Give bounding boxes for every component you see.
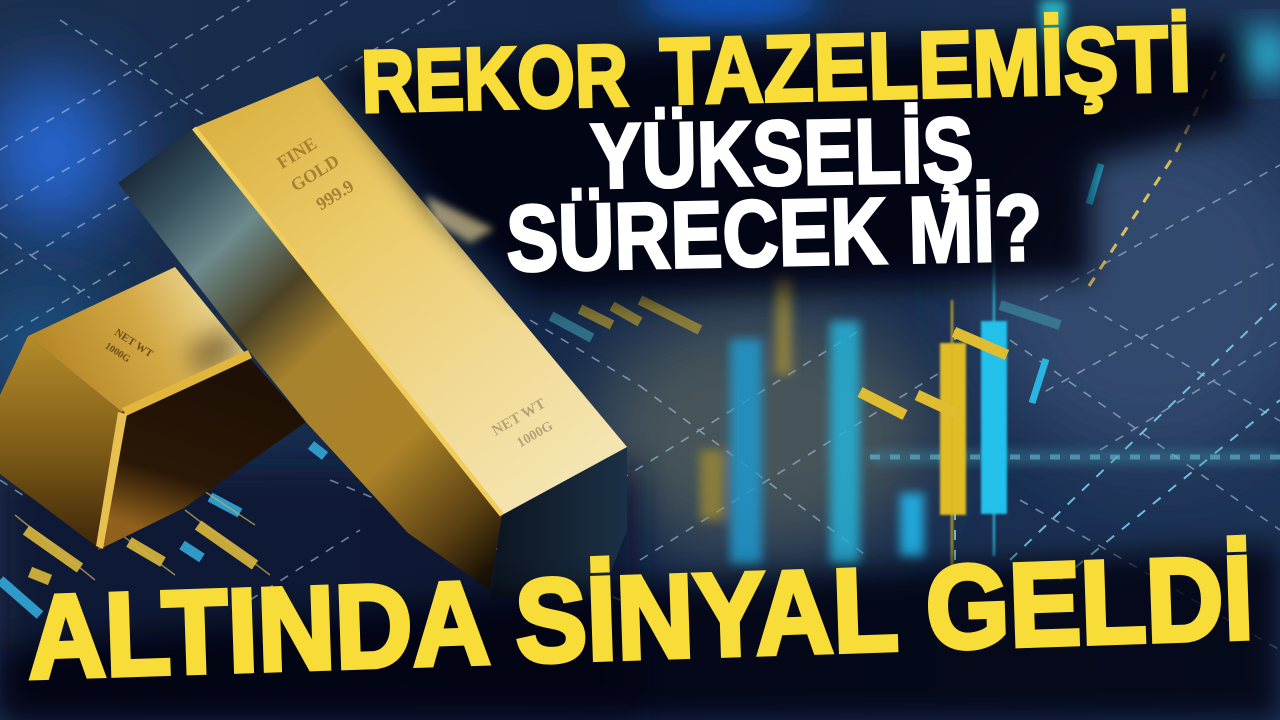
embossed text on bars: 999.9: [312, 176, 357, 214]
embossed text on bars: 1000G: [515, 419, 556, 451]
embossed text on bars: NET WT: [112, 327, 156, 361]
small diagonal candles: [0, 54, 1224, 615]
gold bars: [0, 76, 627, 600]
embossed text on bars: GOLD: [287, 150, 343, 195]
embossed text on bars: [103, 133, 556, 451]
headline: SÜRECEK Mİ?: SÜRECEK Mİ?: [505, 175, 1043, 291]
front bar bright edge: [194, 128, 502, 515]
sharp main candles: [940, 240, 1007, 570]
front bar dark side: [118, 128, 502, 590]
headline: YÜKSELİŞ: YÜKSELİŞ: [590, 99, 974, 208]
embossed text on bars: NET WT: [489, 396, 549, 439]
headline: REKOR TAZELEMİŞTİ: TAZELEMİŞTİ: [659, 6, 1192, 124]
dark shadow behind upper headline: [335, 30, 1244, 298]
blurred candles: [700, 0, 1280, 564]
embossed text on bars: FINE: [273, 133, 320, 173]
embossed text on bars: 1000G: [103, 341, 132, 365]
headline: REKOR TAZELEMİŞTİ: REKOR: [360, 25, 629, 131]
front bar end: [490, 447, 627, 600]
headline: REKOR TAZELEMİŞTİ: [360, 6, 1192, 131]
back bar tip: [425, 195, 494, 243]
back gold bar: [0, 267, 306, 550]
cyan dashed lines: [870, 300, 1280, 580]
front bar top face: [194, 76, 627, 515]
dark band behind lower headline: [0, 545, 1280, 720]
